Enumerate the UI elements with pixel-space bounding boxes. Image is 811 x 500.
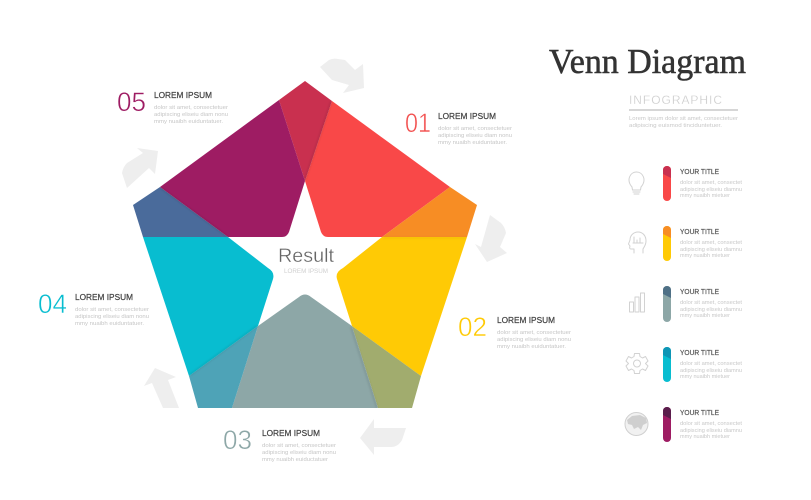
callout 05: dolor sit amet, consectetuer — [154, 105, 228, 111]
overlap: yellow and grey — [352, 326, 421, 408]
callout 05: mmy nuaibh euiduntatuer. — [154, 119, 223, 125]
callout 02 — [458, 312, 571, 350]
text: your title 5: mmy nuaibh mietuer — [680, 434, 730, 440]
text: your title 4 — [680, 348, 742, 380]
petal edge shadows — [162, 102, 378, 407]
callout 03: 03 — [223, 425, 252, 455]
icon: light bulb — [629, 172, 644, 194]
pentagon venn diagram — [133, 81, 477, 408]
overlap: grey and cyan — [189, 326, 258, 408]
callout 02: LOREM IPSUM — [497, 315, 555, 325]
callout 01: adipiscing eliseiu diam nonu — [438, 133, 512, 139]
text: your title 2 — [680, 227, 742, 259]
text: your title 4: dolor sit amet, consectet — [680, 361, 742, 367]
subtitle block: Lorem ipsum dolor sit amet, consectetuer — [629, 116, 738, 122]
petal 01: red — [305, 101, 450, 237]
text: your title 3: dolor sit amet, consectet — [680, 300, 742, 306]
callout 05: adipiscing eliseiu diam nonu — [154, 112, 228, 118]
icon: bar chart — [630, 293, 644, 312]
callout 04: adipiscing eliseiu diam nonu — [75, 314, 149, 320]
text: your title 2: mmy nuaibh mietuer — [680, 253, 730, 259]
petal 05: purple — [160, 100, 305, 237]
callout 01: 01 — [405, 108, 431, 138]
icon: head with chart — [628, 232, 646, 253]
pill: purple — [663, 407, 671, 442]
text: your title 3: mmy nuaibh mietuer — [680, 313, 730, 319]
callout 02: 02 — [458, 312, 487, 342]
callout 04: mmy nuaibh euiduntatuer. — [75, 321, 144, 327]
callout 01 — [405, 108, 512, 146]
text: your title 3: YOUR TITLE — [680, 287, 719, 296]
text: your title 1: YOUR TITLE — [680, 167, 719, 176]
callout 01: dolor sit amet, consectetuer — [438, 126, 512, 132]
petal 04: cyan — [143, 237, 273, 376]
center label: Result: LOREM IPSUM — [284, 268, 328, 275]
petal 02: yellow — [337, 237, 467, 376]
text: your title 5 — [680, 408, 742, 440]
list item 3 — [630, 286, 742, 322]
text: your title 4: adipiscing eliseiu diamnu — [680, 368, 742, 374]
petal 03: grey teal — [232, 294, 378, 408]
text: your title 5: dolor sit amet, consectet — [680, 421, 742, 427]
callout 05 — [117, 87, 228, 125]
pill: slate grey — [663, 286, 671, 322]
text: your title 1: mmy nuaibh mietuer — [680, 193, 730, 199]
cycle arrows — [122, 59, 507, 455]
callout 05: LOREM IPSUM — [154, 90, 212, 100]
callout 01: mmy nuaibh euiduntatuer. — [438, 140, 507, 146]
callout 03 — [223, 425, 336, 463]
callout 02: adipiscing eliseiu diam nonu — [497, 337, 571, 343]
callout 04: dolor sit amet, consectetuer — [75, 307, 149, 313]
subtitle block: adipiscing euismod tinciduntetuer. — [629, 123, 722, 129]
text: your title 4: mmy nuaibh mietuer — [680, 374, 730, 380]
arrow: lower left — [144, 368, 179, 408]
list item 2 — [628, 226, 742, 261]
text: your title 5: adipiscing eliseiu diamnu — [680, 428, 742, 434]
subtitle block — [629, 93, 738, 129]
list item 4 — [626, 347, 742, 382]
callout 05: 05 — [117, 87, 146, 117]
text: your title 2: adipiscing eliseiu diamnu — [680, 247, 742, 253]
icon: globe — [625, 412, 648, 436]
callout 04: 04 — [38, 289, 67, 319]
callout 02: dolor sit amet, consectetuer — [497, 330, 571, 336]
list item 5 — [625, 407, 742, 442]
callout 03: adipiscing eliseiu diam nonu — [262, 450, 336, 456]
pill: red — [663, 166, 671, 201]
arrow: upper left — [122, 148, 158, 188]
callout 04 — [38, 289, 149, 327]
overlap: red and purple — [279, 81, 332, 181]
callout 03: mmy nuaibh euiductatuer — [262, 457, 328, 463]
callout 04: LOREM IPSUM — [75, 292, 133, 302]
text: your title 4: YOUR TITLE — [680, 348, 719, 357]
text: your title 1: adipiscing eliseiu diamnu — [680, 187, 742, 193]
callout 01: LOREM IPSUM — [438, 111, 496, 121]
arrow: right — [475, 215, 507, 262]
text: your title 2: dolor sit amet, consectet — [680, 240, 742, 246]
overlap: cyan and purple — [133, 187, 228, 237]
arrow: bottom — [360, 419, 406, 455]
icon: gear — [626, 354, 648, 374]
subtitle block: INFOGRAPHIC — [629, 93, 722, 107]
text: your title 3: adipiscing eliseiu diamnu — [680, 307, 742, 313]
text: your title 2: YOUR TITLE — [680, 227, 719, 236]
overlap: red and yellow — [382, 187, 477, 237]
arrow: top — [320, 59, 364, 93]
callout 02: mmy nuaibh euiduntatuer. — [497, 344, 566, 350]
pill: orange yellow — [663, 226, 671, 261]
list item 1 — [629, 166, 742, 201]
center label: Result — [278, 246, 335, 275]
title: Venn Diagram — [549, 42, 746, 81]
callout 03: LOREM IPSUM — [262, 428, 320, 438]
text: your title 1: dolor sit amet, consectet — [680, 180, 742, 186]
text: your title 3 — [680, 287, 742, 319]
text: your title 5: YOUR TITLE — [680, 408, 719, 417]
center label: Result: Result — [278, 246, 335, 267]
pill: cyan — [663, 347, 671, 382]
text: your title 1 — [680, 167, 742, 199]
callout 03: dolor sit amet, consectetuer — [262, 443, 336, 449]
